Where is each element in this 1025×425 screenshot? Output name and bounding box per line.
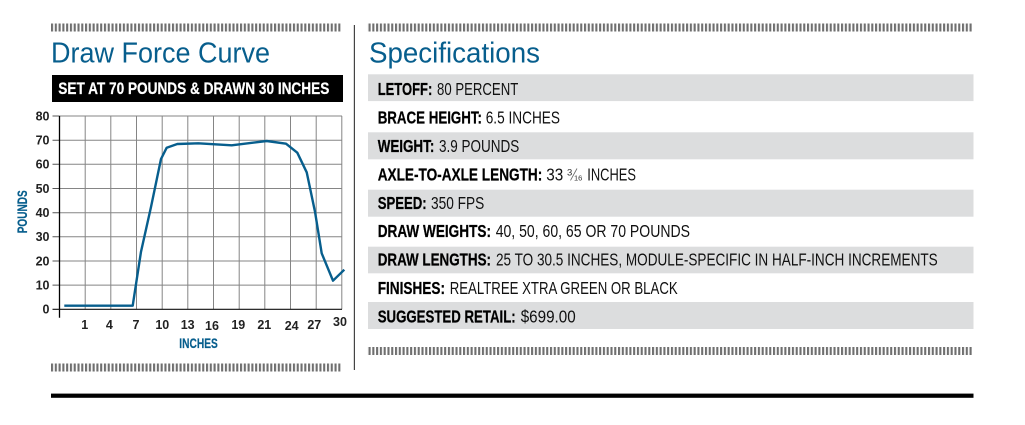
spec row: weight: 3.9 POUNDS [439, 136, 519, 156]
spec row: draw weights: DRAW WEIGHTS: [378, 221, 491, 241]
spec row: letoff: LETOFF: [378, 79, 432, 99]
spec row: axle-to-axle length: 16 [574, 173, 582, 182]
spec row: draw lengths: DRAW LENGTHS: [378, 250, 491, 270]
y-axis tick labels: 80 [36, 109, 50, 123]
spec row: finishes: REALTREE XTRA GREEN OR BLACK [450, 278, 678, 298]
spec row: suggested retail: $699.00 [521, 306, 576, 326]
subtitle bar: SET AT 70 POUNDS & DRAWN 30 INCHES [58, 80, 329, 98]
spec row: finishes [378, 278, 678, 298]
x-axis tick labels: 13 [181, 318, 195, 332]
x-axis tick labels [81, 315, 347, 333]
y-axis tick labels: 50 [36, 182, 50, 196]
subtitle bar [52, 75, 343, 102]
spec row: axle-to-axle length: INCHES [587, 164, 636, 184]
y-axis tick labels: 60 [36, 158, 50, 172]
spec row: brace height: 6.5 INCHES [486, 107, 560, 127]
spec row: speed: 350 FPS [431, 193, 484, 213]
x-axis tick labels: 7 [133, 318, 140, 332]
spec row: speed: SPEED: [378, 193, 427, 213]
spec row: axle-to-axle length: AXLE-TO-AXLE LENGTH: [378, 164, 542, 184]
spec row: draw weights [378, 221, 690, 241]
x-axis tick labels: 21 [257, 318, 271, 332]
x-axis tick labels: 4 [106, 318, 113, 332]
spec row: draw lengths [368, 247, 974, 273]
x-axis tick labels: 27 [307, 318, 321, 332]
spec row: letoff [368, 74, 974, 101]
y-axis tick labels: 40 [36, 206, 50, 220]
heading: draw force curve: Draw Force Curve [51, 38, 270, 70]
panel: specifications [367, 24, 974, 355]
spec row: weight [368, 132, 974, 159]
spec row: weight: WEIGHT: [378, 136, 434, 156]
x-axis tick labels: 16 [205, 319, 219, 333]
spec row: brace height: BRACE HEIGHT: [378, 107, 482, 127]
y-axis tick labels: 20 [36, 254, 50, 268]
heading: specifications: Specifications [369, 38, 540, 70]
x-axis tick labels: 24 [285, 319, 299, 333]
y-axis tick labels: 30 [36, 230, 50, 244]
spec row: suggested retail: SUGGESTED RETAIL: [378, 306, 516, 326]
x-axis tick labels: 30 [333, 315, 347, 329]
line chart: draw force [14, 109, 347, 351]
x-axis title: INCHES [179, 335, 218, 351]
spec row: axle-to-axle length: 3 [567, 168, 572, 178]
spec row: speed [368, 190, 974, 217]
panel: draw force curve [14, 24, 347, 372]
y-axis title: POUNDS [14, 190, 30, 233]
x-axis tick labels: 19 [231, 318, 245, 332]
spec row: axle-to-axle length: 33 [546, 164, 563, 184]
x-axis tick labels: 10 [155, 318, 169, 332]
y-axis tick labels: 70 [36, 134, 50, 148]
y-axis tick labels [36, 109, 50, 317]
spec row: finishes: FINISHES: [378, 278, 445, 298]
y-axis tick labels: 10 [36, 278, 50, 292]
spec row: letoff: 80 PERCENT [437, 79, 519, 99]
force curve line [64, 141, 344, 306]
x-axis tick labels: 1 [81, 318, 88, 332]
spec row: suggested retail [368, 302, 974, 329]
spec row: draw weights: 40, 50, 60, 65 OR 70 POUNDS [496, 221, 690, 241]
y-axis tick labels: 0 [43, 303, 50, 317]
